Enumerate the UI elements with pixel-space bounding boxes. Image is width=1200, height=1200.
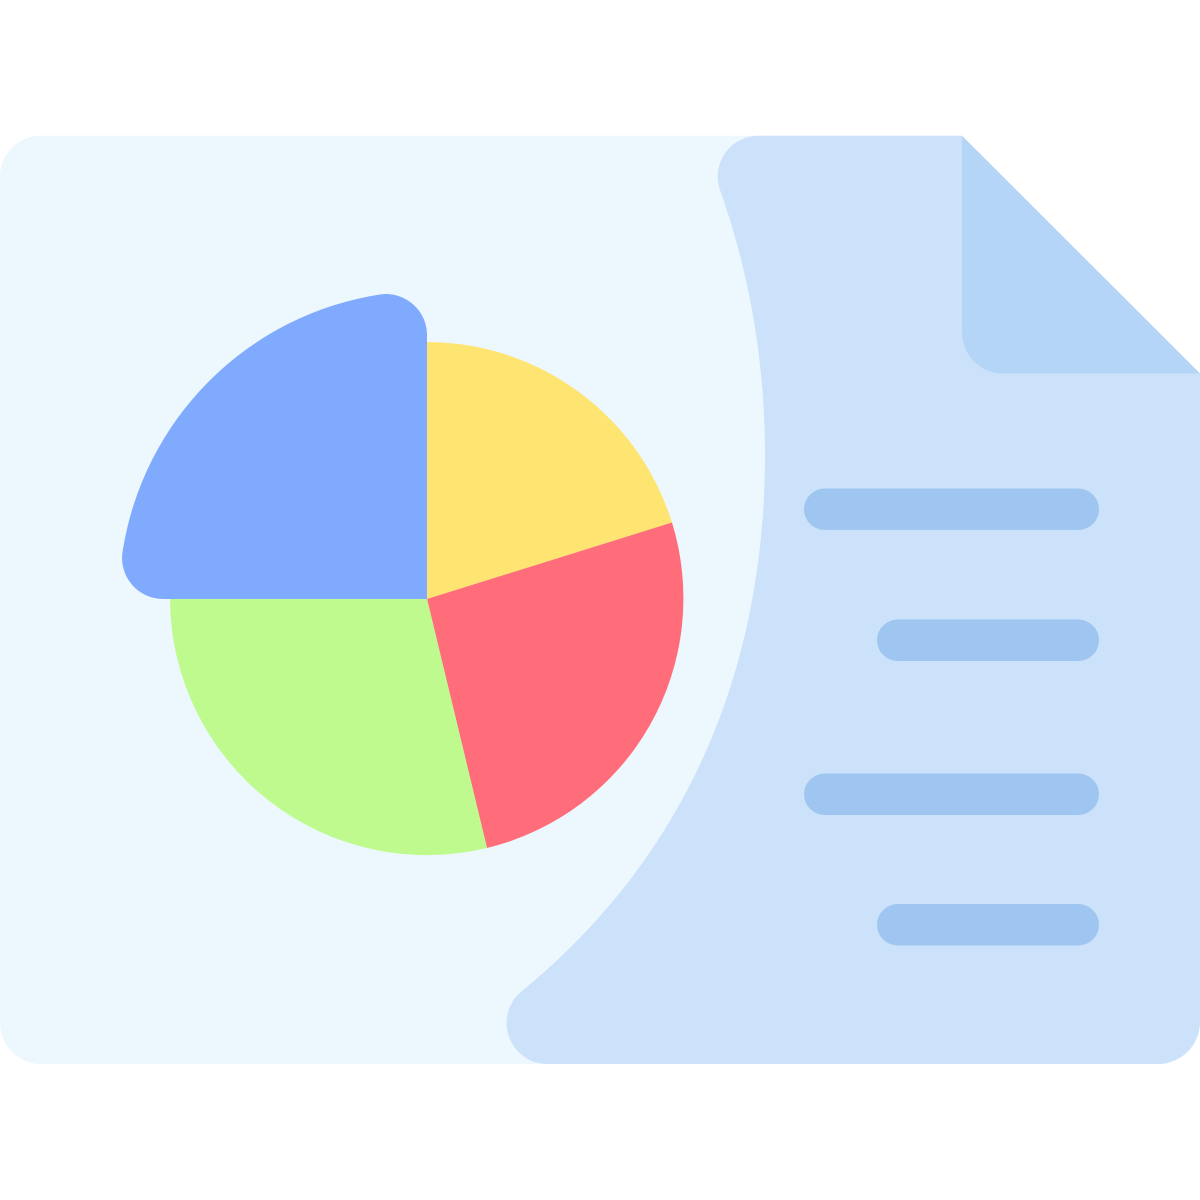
text line 3 (804, 774, 1099, 815)
pie chart (122, 294, 683, 855)
panel: document page background (0, 136, 1200, 1064)
icon: folded corner (962, 136, 1200, 374)
text line 1 (804, 488, 1099, 530)
panel: curled page overlay (507, 136, 1200, 1064)
pie slice: blue raised quarter (122, 294, 427, 599)
text line 4 (877, 904, 1099, 946)
text line 2 (877, 620, 1099, 661)
pie slice: yellow (427, 342, 672, 599)
pie slice: green (170, 599, 487, 855)
pie slice: red (427, 522, 683, 848)
text lines placeholder (804, 488, 1099, 946)
